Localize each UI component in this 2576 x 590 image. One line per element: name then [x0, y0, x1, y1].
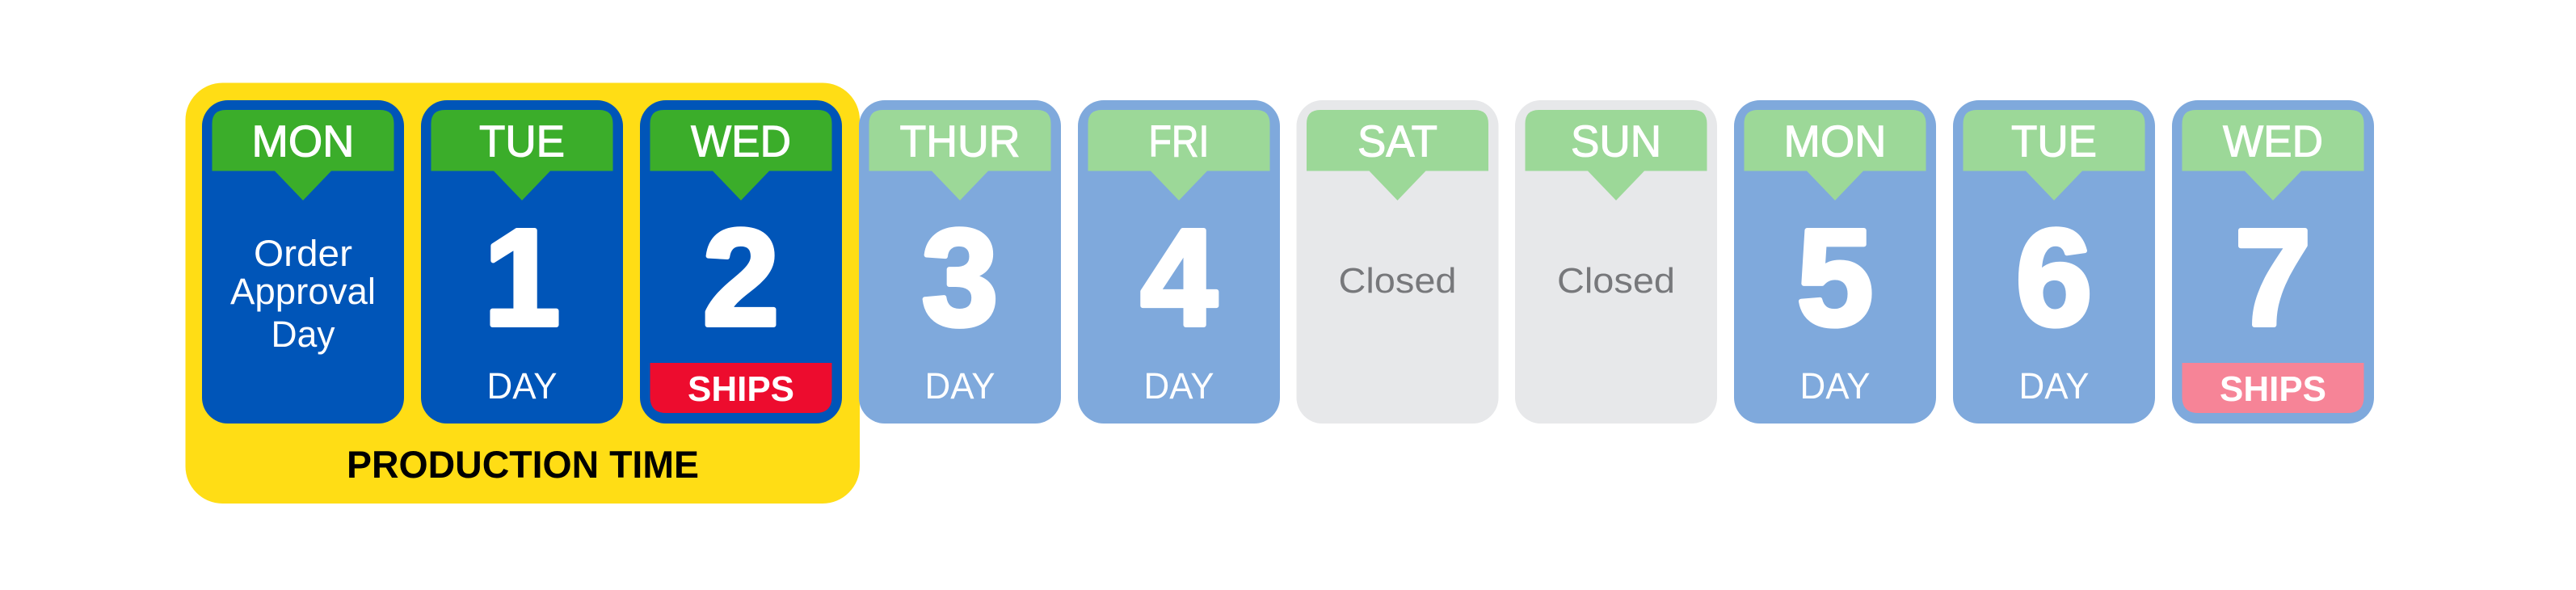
card: Sunday closed: [1515, 100, 1717, 424]
card: Monday order approval day: MON: [252, 116, 354, 166]
card: Thursday day 3: THUR: [900, 116, 1020, 166]
card: Monday order approval day: Approval: [230, 271, 376, 312]
card: Tuesday day 6: TUE: [2011, 116, 2097, 166]
card: Thursday day 3: 3: [922, 201, 998, 355]
card: Tuesday day 1: [421, 100, 623, 424]
card: Monday order approval day: [202, 100, 404, 424]
card: Friday day 4: [1078, 100, 1280, 424]
card: Thursday day 3: DAY: [924, 365, 995, 407]
card: Wednesday day 7 ships: 7: [2235, 201, 2311, 355]
card: Monday day 5: MON: [1784, 116, 1886, 166]
card: Wednesday day 2 ships: SHIPS: [688, 369, 794, 409]
card: Tuesday day 1: DAY: [486, 365, 558, 407]
card: Tuesday day 1: TUE: [479, 116, 565, 166]
card: Wednesday day 7 ships: WED: [2223, 116, 2323, 166]
card: Sunday closed: SUN: [1571, 116, 1661, 166]
card: Thursday day 3: [859, 100, 1061, 424]
card: Tuesday day 6: [1953, 100, 2155, 424]
card: Wednesday day 2 ships: 2: [703, 201, 779, 355]
card: Friday day 4: DAY: [1144, 365, 1214, 407]
card: Saturday closed: SAT: [1357, 116, 1437, 166]
card: Wednesday day 7 ships: [2172, 100, 2374, 424]
card: Monday order approval day: Day: [271, 314, 335, 355]
card: Wednesday day 2 ships: [640, 100, 842, 424]
card: Tuesday day 6: DAY: [2018, 365, 2090, 407]
card: Wednesday day 2 ships: WED: [691, 116, 791, 166]
card: Friday day 4: FRI: [1149, 116, 1209, 166]
card: Saturday closed: Closed: [1338, 261, 1456, 301]
panel: production time highlight: [186, 82, 860, 504]
card: Sunday closed: Closed: [1557, 261, 1675, 301]
card: Tuesday day 6: 6: [2016, 201, 2092, 355]
card: Wednesday day 7 ships: SHIPS: [2220, 369, 2326, 409]
card: Monday day 5: 5: [1797, 201, 1873, 355]
card: Saturday closed: [1296, 100, 1498, 424]
card: Monday order approval day: Order: [254, 233, 352, 274]
card: Monday day 5: [1734, 100, 1936, 424]
card: Friday day 4: 4: [1141, 201, 1217, 355]
card: Tuesday day 1: 1: [484, 201, 560, 355]
heading: production time: PRODUCTION TIME: [347, 443, 699, 486]
card: Monday day 5: DAY: [1800, 365, 1870, 407]
